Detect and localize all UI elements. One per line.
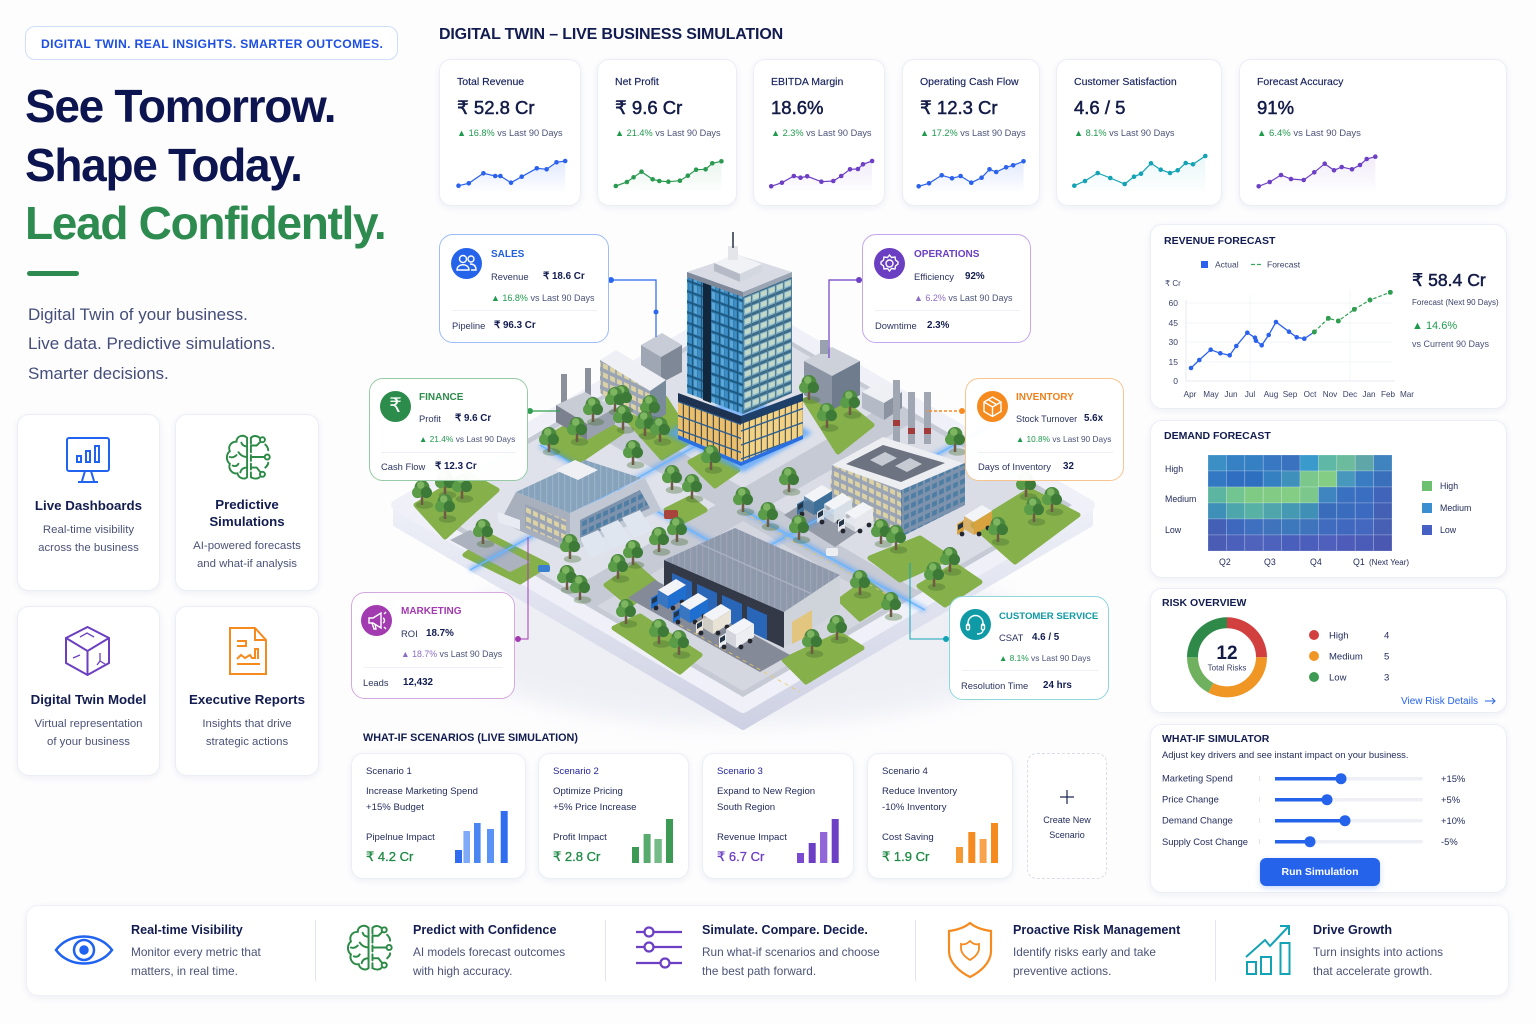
panel: what-if simulator: WHAT-IF SIMULATOR (1162, 733, 1269, 745)
line chart: Mar (1400, 390, 1414, 399)
scenario card 1: +15% Budget (366, 802, 424, 813)
hero title: Lead Confidently. (25, 197, 385, 249)
sparkline (768, 158, 874, 189)
donut chart: 4 (1384, 630, 1389, 642)
donut chart: View Risk Details (1401, 696, 1478, 707)
benefit: drive growth: that accelerate growth. (1313, 964, 1432, 978)
feature card: live dashboards (17, 414, 160, 591)
KPI card: total revenue: ₹ 52.8 Cr (457, 97, 535, 118)
trucks and vans (538, 485, 992, 649)
hero title: See Tomorrow. (25, 80, 335, 132)
hero title: Shape Today. (25, 138, 302, 190)
KPI card: operating cash flow (902, 59, 1040, 206)
icon: brain (226, 434, 271, 480)
scenario card 3: ₹ 6.7 Cr (717, 849, 764, 864)
KPI card: EBITDA margin: 18.6% (771, 97, 823, 118)
benefit: simulate compare decide (636, 923, 880, 978)
callout: customer service: Resolution Time (961, 680, 1028, 691)
KPI card: forecast accuracy: Forecast Accuracy (1257, 76, 1343, 88)
sliders: Supply Cost Change (1162, 836, 1248, 847)
panel: revenue forecast: ▲ 14.6% (1412, 320, 1457, 332)
benefit: predict with confidence (347, 923, 565, 978)
heatmap: (Next Year) (1369, 558, 1409, 567)
benefit: real-time visibility: matters, in real time. (131, 964, 238, 978)
callout: sales: ₹ 18.6 Cr (543, 271, 585, 282)
sliders: Demand Change (1162, 814, 1233, 826)
icon: rupee (380, 391, 411, 422)
KPI card: customer satisfaction (1056, 59, 1222, 206)
hero title (25, 80, 385, 249)
callout: customer service: CSAT (999, 632, 1023, 643)
callout: finance: Profit (419, 413, 441, 424)
sliders: +5% (1441, 794, 1460, 805)
callout: sales: Pipeline (452, 320, 485, 331)
benefit: simulate compare decide: the best path forward. (702, 964, 816, 978)
callout: finance: ▲ 21.4% vs Last 90 Days (419, 434, 515, 444)
connector: sales (609, 277, 658, 337)
callout: marketing: 18.7% (426, 628, 454, 639)
line chart: Apr (1184, 390, 1197, 399)
benefit: simulate compare decide: Simulate. Compare. Decide. (702, 923, 868, 937)
line chart: 45 (1169, 318, 1178, 328)
scenario card 4: Scenario 4 (882, 766, 928, 777)
line chart: Sep (1283, 390, 1298, 399)
line chart: Jul (1245, 390, 1255, 399)
icon: shield (948, 922, 992, 978)
scenario card 3: South Region (717, 802, 775, 813)
callout: customer service: 24 hrs (1043, 680, 1072, 691)
callout: operations (862, 234, 1031, 343)
callout: customer service (949, 596, 1109, 700)
back small buildings (556, 333, 902, 440)
panel: risk overview (1150, 588, 1507, 713)
donut chart: Low (1329, 672, 1347, 684)
callout: sales: ₹ 96.3 Cr (494, 320, 536, 331)
benefit: proactive risk management: preventive actions. (1013, 964, 1111, 978)
callout: operations: ▲ 6.2% vs Last 90 Days (914, 293, 1012, 303)
line chart: 30 (1169, 337, 1178, 347)
heatmap: Medium (1440, 503, 1471, 513)
heatmap: Q2 (1219, 557, 1231, 567)
accent rule (27, 271, 79, 276)
KPI card: operating cash flow: ₹ 12.3 Cr (920, 97, 998, 118)
donut chart: 12 (1216, 643, 1238, 664)
tagline pill: DIGITAL TWIN. REAL INSIGHTS. SMARTER OUTCOMES. (41, 37, 383, 51)
donut chart (1187, 617, 1496, 707)
panel: revenue forecast: vs Current 90 Days (1412, 339, 1489, 349)
scenario card 2 (538, 753, 689, 879)
line chart: May (1203, 390, 1220, 399)
heatmap: Q1 (1353, 557, 1365, 567)
card: create new scenario: Scenario (1049, 830, 1085, 840)
glowing data routes (470, 398, 1000, 692)
front warehouse with loading docks (664, 528, 840, 648)
scenario card 3 (702, 753, 854, 879)
KPI card: operating cash flow: ▲ 17.2% vs Last 90 Days (920, 128, 1026, 138)
sparkline (916, 159, 1026, 189)
scenario card 1: ₹ 4.2 Cr (366, 849, 413, 864)
benefit: real-time visibility: Monitor every metric that (131, 945, 261, 959)
donut chart: Medium (1329, 652, 1363, 662)
panel: revenue forecast: ₹ 58.4 Cr (1412, 270, 1486, 290)
connector: marketing (515, 537, 528, 642)
donut chart: Total Risks (1208, 664, 1246, 672)
icon: plus (1060, 790, 1074, 804)
line chart (1165, 260, 1414, 399)
benefit: proactive risk management (948, 922, 1180, 978)
KPI card: EBITDA margin (753, 59, 885, 206)
icon: brain (347, 924, 393, 970)
icon: rupee: ₹ (389, 395, 402, 417)
callout: operations: OPERATIONS (914, 249, 979, 260)
KPI card: forecast accuracy: 91% (1257, 97, 1294, 118)
benefit: predict with confidence: Predict with Confidence (413, 923, 556, 937)
scenario card 2: Optimize Pricing (553, 786, 623, 797)
feature card: digital twin model: Digital Twin Model (31, 692, 146, 707)
central glass tower (669, 232, 810, 472)
icon: sliders (636, 926, 682, 969)
bottom benefits strip (26, 905, 1509, 996)
card: create new scenario (1027, 753, 1107, 879)
line chart: Aug (1264, 390, 1279, 399)
callout: operations: Efficiency (914, 271, 954, 282)
callout: inventory: 5.6x (1084, 413, 1103, 424)
feature card: live dashboards: Live Dashboards (35, 498, 142, 513)
KPI card: forecast accuracy: ▲ 6.4% vs Last 90 Days (1257, 128, 1361, 139)
bar chart (797, 819, 839, 863)
isometric digital twin city (391, 232, 1095, 730)
heatmap: High (1165, 464, 1183, 474)
ground lots and grass (416, 318, 1078, 691)
icon: monitor (66, 437, 110, 483)
KPI card: EBITDA margin: EBITDA Margin (771, 76, 843, 88)
benefit: drive growth: Drive Growth (1313, 923, 1392, 937)
KPI card: net profit: ₹ 9.6 Cr (615, 97, 682, 118)
panel: demand forecast (1150, 420, 1507, 578)
sliders: +10% (1441, 815, 1465, 826)
line chart: ₹ Cr (1165, 279, 1181, 288)
platform (396, 302, 1090, 727)
icon: megaphone (361, 605, 392, 636)
KPI card: customer satisfaction: ▲ 8.1% vs Last 90 Days (1074, 128, 1175, 138)
scenario card 4: Cost Saving (882, 832, 934, 843)
callout: customer service: 4.6 / 5 (1032, 632, 1059, 643)
callout: inventory: 32 (1063, 461, 1074, 472)
scenario card 4 (867, 753, 1013, 879)
left warehouse (498, 460, 661, 558)
button: run simulation (1260, 858, 1380, 886)
KPI card: EBITDA margin: ▲ 2.3% vs Last 90 Days (771, 128, 872, 138)
feature card: digital twin model: of your business (47, 736, 130, 748)
panel: revenue forecast: Forecast (Next 90 Days) (1412, 298, 1499, 307)
benefit: simulate compare decide: Run what-if scenarios and choose (702, 945, 880, 959)
trees (412, 375, 1063, 659)
KPI card: operating cash flow: Operating Cash Flow (920, 76, 1019, 88)
feature card: predictive simulations: Simulations (209, 514, 285, 529)
section heading: what-if scenarios: WHAT-IF SCENARIOS (LIVE SIMULATION) (363, 732, 578, 744)
line chart: Jun (1224, 390, 1238, 399)
line chart: Actual (1215, 260, 1239, 270)
icon: eye (54, 935, 114, 965)
sliders: -5% (1441, 836, 1458, 847)
scenario card 3: Revenue Impact (717, 832, 787, 843)
heatmap (1165, 455, 1471, 567)
scenario card 3: Scenario 3 (717, 766, 763, 777)
scenario card 2: Profit Impact (553, 832, 607, 843)
line chart: 60 (1169, 298, 1178, 308)
KPI card: net profit (597, 59, 737, 206)
benefit: real-time visibility: Real-time Visibility (131, 923, 243, 937)
sliders (1162, 772, 1465, 848)
heatmap: High (1440, 481, 1458, 491)
scenario card 4: Reduce Inventory (882, 786, 957, 797)
sliders: +15% (1441, 773, 1465, 784)
callout: marketing: MARKETING (401, 606, 462, 617)
callout: marketing: ▲ 18.7% vs Last 90 Days (401, 649, 502, 659)
sliders: Price Change (1162, 794, 1219, 804)
callout: finance: ₹ 9.6 Cr (455, 413, 491, 424)
benefit: proactive risk management: Proactive Risk Management (1013, 923, 1180, 937)
line chart: Dec (1343, 390, 1357, 399)
tagline pill (25, 26, 398, 60)
scenario card 1 (351, 753, 526, 879)
scenario card 2: +5% Price Increase (553, 802, 636, 813)
bar chart (632, 819, 673, 863)
callout: inventory: INVENTORY (1016, 392, 1074, 403)
line chart: 15 (1169, 357, 1178, 367)
sliders: Marketing Spend (1162, 772, 1233, 784)
sparkline (614, 159, 724, 188)
callout: finance (369, 378, 528, 481)
line chart: Jan (1362, 390, 1376, 399)
sparkline (1256, 154, 1378, 189)
scenario card 2: ₹ 2.8 Cr (553, 849, 600, 864)
icon: cube (65, 626, 110, 676)
callout: sales: SALES (491, 249, 524, 260)
feature card: executive reports (175, 606, 319, 776)
callout: marketing (351, 592, 515, 699)
icon: headset (960, 609, 991, 640)
feature card: executive reports: Executive Reports (189, 692, 305, 707)
panel: what-if simulator (1150, 724, 1507, 893)
benefit: proactive risk management: Identify risks early and take (1013, 945, 1156, 959)
callout: finance: FINANCE (419, 392, 463, 403)
connector: operations (828, 277, 862, 358)
feature card: live dashboards: across the business (38, 542, 139, 554)
panel: what-if simulator: Adjust key drivers and see instant impact on your business. (1162, 749, 1408, 760)
sparkline (1072, 154, 1208, 188)
panel: revenue forecast (1150, 224, 1507, 409)
callout: operations: 2.3% (927, 320, 949, 331)
feature card: digital twin model: Virtual representation (34, 718, 143, 730)
callout: marketing: Leads (363, 677, 389, 688)
feature card: predictive simulations: Predictive (215, 497, 279, 512)
donut chart: High (1329, 630, 1349, 642)
panel: risk overview: RISK OVERVIEW (1162, 597, 1246, 609)
panel: demand forecast: DEMAND FORECAST (1164, 430, 1271, 442)
feature card: predictive simulations: and what-if analysis (197, 558, 297, 570)
callout: finance: Cash Flow (381, 461, 425, 472)
callout: operations: Downtime (875, 320, 917, 331)
hero description: Digital Twin of your business. (28, 305, 248, 324)
KPI card: net profit: Net Profit (615, 76, 659, 88)
icon: people (451, 248, 482, 279)
callout: operations: 92% (965, 271, 985, 282)
benefit: predict with confidence: with high accuracy. (413, 964, 512, 978)
heatmap: Medium (1165, 494, 1196, 504)
KPI card: customer satisfaction: Customer Satisfaction (1074, 76, 1177, 88)
scenario card 2: Scenario 2 (553, 766, 599, 777)
icon: growth chart (1245, 925, 1290, 975)
scenario card 1: Pipelnue Impact (366, 832, 435, 843)
sparkline (456, 158, 568, 188)
scenario card 4: -10% Inventory (882, 802, 947, 813)
heatmap: Low (1165, 525, 1182, 535)
panel: revenue forecast: REVENUE FORECAST (1164, 235, 1275, 247)
callout: sales: ▲ 16.8% vs Last 90 Days (491, 293, 594, 303)
connector: customer service (910, 563, 949, 642)
donut chart: 5 (1384, 652, 1389, 662)
right factory with smokestacks (830, 380, 965, 537)
KPI card: total revenue: ▲ 16.8% vs Last 90 Days (457, 128, 563, 138)
heatmap: Q4 (1310, 557, 1322, 567)
callout: inventory: ▲ 10.8% vs Last 90 Days (1016, 434, 1111, 444)
callout: sales: Revenue (491, 271, 529, 282)
line chart: Oct (1304, 390, 1317, 399)
card: create new scenario: Create New (1043, 815, 1091, 825)
icon: box (977, 391, 1008, 422)
benefit: drive growth: Turn insights into actions (1313, 945, 1443, 959)
icon: report (229, 627, 267, 675)
callout: marketing: 12,432 (403, 677, 433, 688)
line chart: 0 (1173, 376, 1178, 386)
callout: inventory (965, 378, 1124, 481)
feature card: executive reports: Insights that drive (202, 718, 292, 730)
donut chart: 3 (1384, 672, 1389, 684)
callout: customer service: ▲ 8.1% vs Last 90 Days (999, 653, 1091, 663)
scenario card 3: Expand to New Region (717, 786, 815, 797)
bar chart (956, 823, 998, 863)
callout: marketing: ROI (401, 628, 418, 639)
callout: sales (439, 234, 609, 343)
connector: finance (528, 408, 560, 414)
heatmap: Q3 (1264, 557, 1276, 567)
bar chart (455, 811, 508, 863)
callout: customer service: CUSTOMER SERVICE (999, 611, 1098, 622)
feature card: digital twin model (17, 606, 160, 776)
hero description: Smarter decisions. (28, 364, 169, 383)
KPI card: total revenue: Total Revenue (457, 76, 524, 88)
button: run simulation: Run Simulation (1282, 866, 1358, 878)
scenario card 1: Scenario 1 (366, 766, 412, 777)
line chart: Feb (1381, 390, 1396, 399)
heatmap: Low (1440, 525, 1457, 535)
hero description: Live data. Predictive simulations. (28, 334, 276, 353)
feature card: live dashboards: Real-time visibility (43, 524, 134, 536)
section heading: live business simulation: DIGITAL TWIN – LIVE BUSINESS SIMULATION (439, 26, 783, 43)
feature card: predictive simulations: AI-powered forecasts (193, 540, 301, 552)
benefit: real-time visibility (54, 923, 261, 978)
scenario card 4: ₹ 1.9 Cr (882, 849, 929, 864)
KPI card: total revenue (439, 59, 581, 206)
KPI card: net profit: ▲ 21.4% vs Last 90 Days (615, 128, 721, 138)
benefit: predict with confidence: AI models forecast outcomes (413, 945, 565, 959)
icon: gear (874, 248, 905, 279)
feature card: predictive simulations (175, 414, 319, 591)
callout: inventory: Stock Turnover (1016, 414, 1077, 424)
line chart: Forecast (1267, 260, 1301, 270)
callout: inventory: Days of Inventory (978, 461, 1051, 472)
benefit: drive growth (1245, 923, 1443, 978)
line chart: Nov (1323, 390, 1338, 399)
KPI card: customer satisfaction: 4.6 / 5 (1074, 97, 1125, 118)
connector: inventory (926, 408, 965, 414)
hero description (28, 305, 276, 383)
callout: finance: ₹ 12.3 Cr (435, 461, 477, 472)
KPI card: forecast accuracy (1239, 59, 1507, 206)
feature card: executive reports: strategic actions (206, 736, 288, 748)
scenario card 1: Increase Marketing Spend (366, 786, 478, 797)
